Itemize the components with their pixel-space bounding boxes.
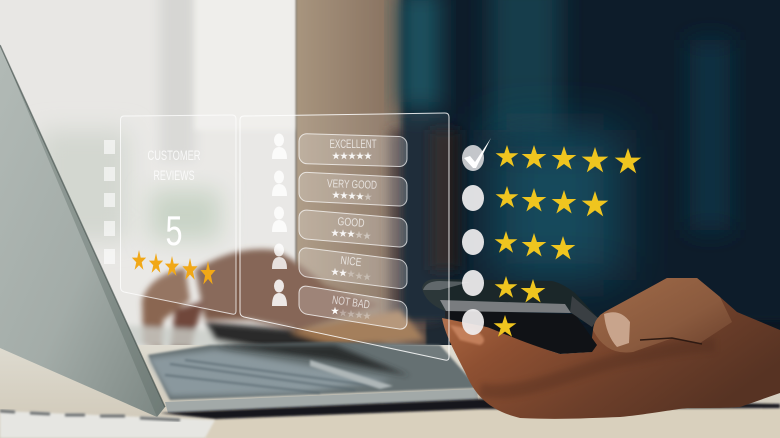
- thumb: [593, 278, 732, 353]
- icon: check mark: [464, 138, 491, 168]
- row: nice: NICE: [340, 255, 362, 269]
- laptop base and keyboard: [148, 342, 780, 419]
- row: good: [272, 206, 407, 248]
- row: excellent: EXCELLENT: [330, 139, 376, 151]
- blurred typing hand behind panels: [120, 249, 425, 355]
- row: excellent: [272, 134, 407, 167]
- panel: rating list: [240, 113, 449, 360]
- row: not bad: NOT BAD: [331, 294, 371, 312]
- side menu squares: [104, 140, 115, 264]
- paper on table: [0, 411, 215, 438]
- yellow star ratings: [494, 145, 641, 337]
- heading: reviews line two: REVIEWS: [154, 168, 194, 183]
- row: not bad: [272, 280, 407, 330]
- laptop lid: [0, 45, 165, 417]
- row: nice: [272, 244, 407, 290]
- heading: customer reviews: CUSTOMER: [148, 148, 201, 163]
- row: very good: VERY GOOD: [327, 178, 377, 192]
- score number: 5: [166, 207, 182, 254]
- radio circles: [462, 145, 484, 335]
- table surface: [0, 345, 780, 438]
- panel: customer reviews score: [120, 115, 236, 314]
- row: very good: [272, 170, 407, 206]
- row: good: GOOD: [337, 216, 365, 230]
- hand holding phone: [442, 278, 780, 419]
- phone: [422, 279, 598, 354]
- gold star rating: [132, 250, 216, 285]
